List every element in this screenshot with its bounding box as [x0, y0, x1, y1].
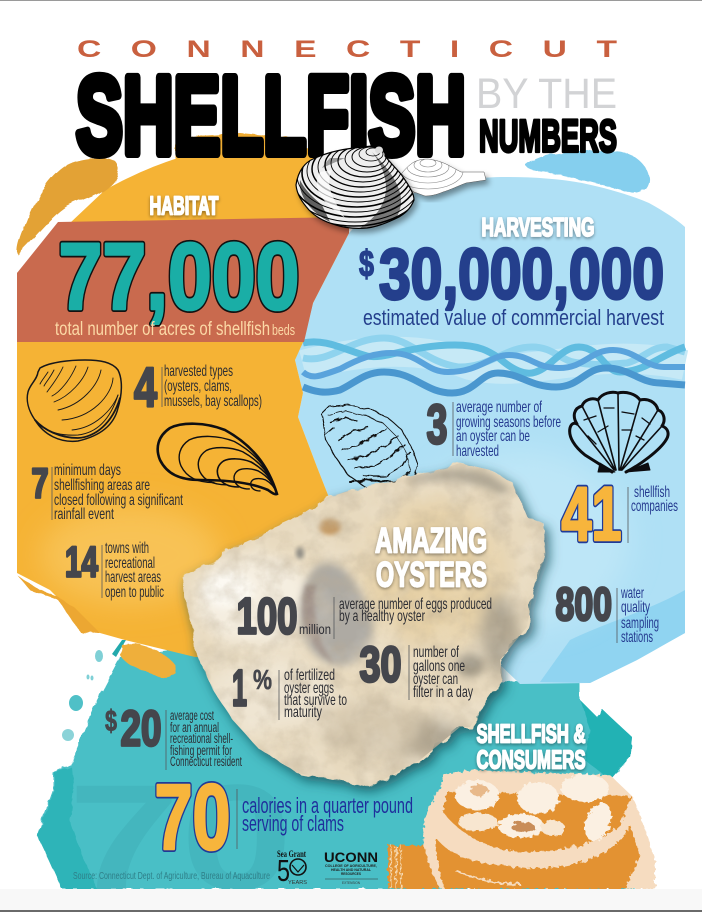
stat: 100 million eggs: by a healthy oyster: [339, 608, 425, 625]
logo: UConn: EXTENSION: [342, 881, 361, 885]
stat: 7 days: [32, 460, 183, 523]
stat: 4 harvested types: harvested types: [164, 363, 233, 380]
stat: 4 harvested types: (oysters, clams,: [164, 378, 232, 395]
stat: 70 calories: [154, 765, 413, 869]
stat: 41 companies: shellfish: [634, 484, 670, 501]
stat: 77,000 acres: total number of acres of shellfish: [55, 319, 270, 340]
icon: clam line drawing: [27, 360, 121, 441]
stat: 3 growing seasons: average number of: [456, 399, 542, 416]
stat: 77,000 acres: 77,000: [58, 224, 300, 330]
icon: large engraved clam: [295, 146, 421, 237]
stat: 1% survive: that survive to: [284, 692, 347, 709]
stat: $20 permit: for an annual: [170, 720, 219, 735]
stat: 70 calories: calories in a quarter pound: [242, 793, 413, 818]
stat: 70 calories: serving of clams: [242, 811, 344, 836]
stat: 14 towns: [65, 538, 164, 601]
stat: 100 million eggs: average number of eggs produced: [339, 596, 492, 613]
logo: UConn: [324, 849, 378, 885]
stat: 7 days: 7: [32, 460, 48, 506]
stat: 100 million eggs: million: [299, 621, 331, 637]
stat: 7 days: minimum days: [54, 462, 121, 479]
title: CONNECTICUT: CONNECTICUT: [77, 36, 617, 63]
source note: Source: Connecticut Dept. of Agriculture, Bureau of Aquaculture: [73, 870, 270, 882]
stat: 800 sampling stations: sampling: [621, 615, 659, 632]
stat: 14 towns: recreational: [105, 555, 155, 572]
stat: 1% survive: oyster eggs: [284, 680, 334, 697]
stat: 800 sampling stations: 800: [556, 578, 612, 630]
wave bands: [303, 338, 685, 393]
stat: 1% survive: of fertilized: [284, 667, 335, 684]
stat: 3 growing seasons: harvested: [456, 443, 499, 460]
heading: HABITAT: HABITAT: [150, 190, 219, 220]
stat: 30 gallons: 30: [360, 636, 402, 692]
stat: 3 growing seasons: 3: [426, 392, 448, 456]
stat: 14 towns: open to public: [105, 584, 164, 601]
icon: oyster line drawing: [322, 405, 418, 490]
stat: 1% survive: 1: [232, 660, 247, 716]
logo: Sea Grant 50 years: 5: [277, 853, 290, 888]
stat: 4 harvested types: [134, 356, 262, 418]
stat: 3 growing seasons: [426, 392, 561, 460]
stat: 800 sampling stations: stations: [621, 629, 653, 646]
panel: shellfish and consumers teal background: [37, 640, 640, 912]
stat: 77,000 acres: beds: [272, 322, 295, 339]
logo: UConn: RESOURCES: [341, 872, 362, 876]
stat: 30 gallons: oyster can: [413, 671, 458, 688]
title: NUMBERS: NUMBERS: [479, 110, 617, 162]
stat: 30 gallons: [360, 636, 473, 701]
heading: SHELLFISH & CONSUMERS: [476, 718, 586, 774]
panel: terracotta 77,000 band: [17, 217, 349, 342]
stat: 3 growing seasons: growing seasons before: [456, 414, 561, 431]
photo: oyster shell: [180, 460, 550, 790]
stat: 70 calories: 70: [154, 765, 230, 869]
stat: 30 gallons: gallons one: [413, 658, 465, 675]
heading: SHELLFISH & CONSUMERS: CONSUMERS: [476, 744, 586, 774]
stat: 7 days: shellfishing areas are: [54, 477, 150, 494]
stat: 14 towns: harvest areas: [105, 569, 161, 586]
stat: 70 calories: 70: [154, 765, 230, 869]
stat: 100 million eggs: [236, 588, 492, 644]
stat: $20 permit: Connecticut resident: [170, 754, 242, 769]
illustration: bowl of clams: [388, 770, 655, 889]
logo: Sea Grant 50 years: [277, 849, 307, 888]
heading: SHELLFISH & CONSUMERS: SHELLFISH &: [476, 718, 586, 748]
stat: 800 sampling stations: [556, 578, 659, 646]
logo: Sea Grant 50 years: Sea Grant: [277, 849, 306, 859]
stat: 1% survive: maturity: [284, 704, 322, 721]
logo: UConn: HEALTH AND NATURAL: [331, 868, 372, 872]
logo: UConn: COLLEGE OF AGRICULTURE,: [325, 864, 377, 868]
stat: 14 towns: 14: [65, 538, 98, 586]
stat: 7 days: closed following a significant: [54, 492, 183, 509]
logo: UConn: UCONN: [324, 849, 378, 865]
stat: 7 days: rainfall event: [54, 506, 114, 523]
stat: 41 companies: 41: [562, 472, 622, 557]
icon: small white clam engraving: [393, 153, 486, 196]
stat: 100 million eggs: 100: [236, 588, 298, 644]
title: SHELLFISH: SHELLFISH: [76, 54, 466, 178]
stat: 800 sampling stations: quality: [621, 599, 650, 616]
stat: 30 gallons: number of: [413, 644, 459, 661]
stat: 1% survive: %: [253, 664, 272, 695]
stat: 4 harvested types: 4: [134, 356, 157, 418]
heading: HARVESTING: HARVESTING: [482, 212, 594, 242]
stat: 14 towns: towns with: [105, 540, 149, 557]
heading: AMAZING OYSTERS: OYSTERS: [376, 556, 487, 594]
stat: 30 gallons: filter in a day: [413, 684, 473, 701]
icon: mussel line drawing: [158, 424, 277, 494]
icon: scallop line drawing: [570, 392, 668, 472]
panel: habitat yellow background: [17, 133, 349, 678]
stat: $30,000,000: $: [359, 243, 374, 284]
stat: 77,000 acres: 77,000: [58, 224, 300, 330]
stat: 1% survive: [232, 660, 347, 721]
logo: Sea Grant 50 years: YEARS: [288, 880, 307, 886]
stat: $20 permit: $: [105, 705, 117, 738]
stat: $20 permit: average cost: [170, 708, 214, 723]
stat: $20 permit: fishing permit for: [170, 743, 232, 758]
stat: 3 growing seasons: an oyster can be: [456, 428, 530, 445]
stat: $20 permit: 20: [120, 700, 162, 756]
stat: $20 permit: recreational shell-: [170, 731, 233, 746]
stat: 4 harvested types: mussels, bay scallops): [164, 393, 262, 410]
panel: harvesting blue background: [295, 151, 685, 684]
title: BY THE: BY THE: [476, 70, 617, 118]
stat: 41 companies: 41: [562, 472, 622, 557]
heading: AMAZING OYSTERS: [375, 522, 487, 594]
stat: $20 permit: [105, 700, 242, 770]
stat: 800 sampling stations: water: [620, 585, 644, 602]
heading: AMAZING OYSTERS: AMAZING: [375, 522, 487, 560]
